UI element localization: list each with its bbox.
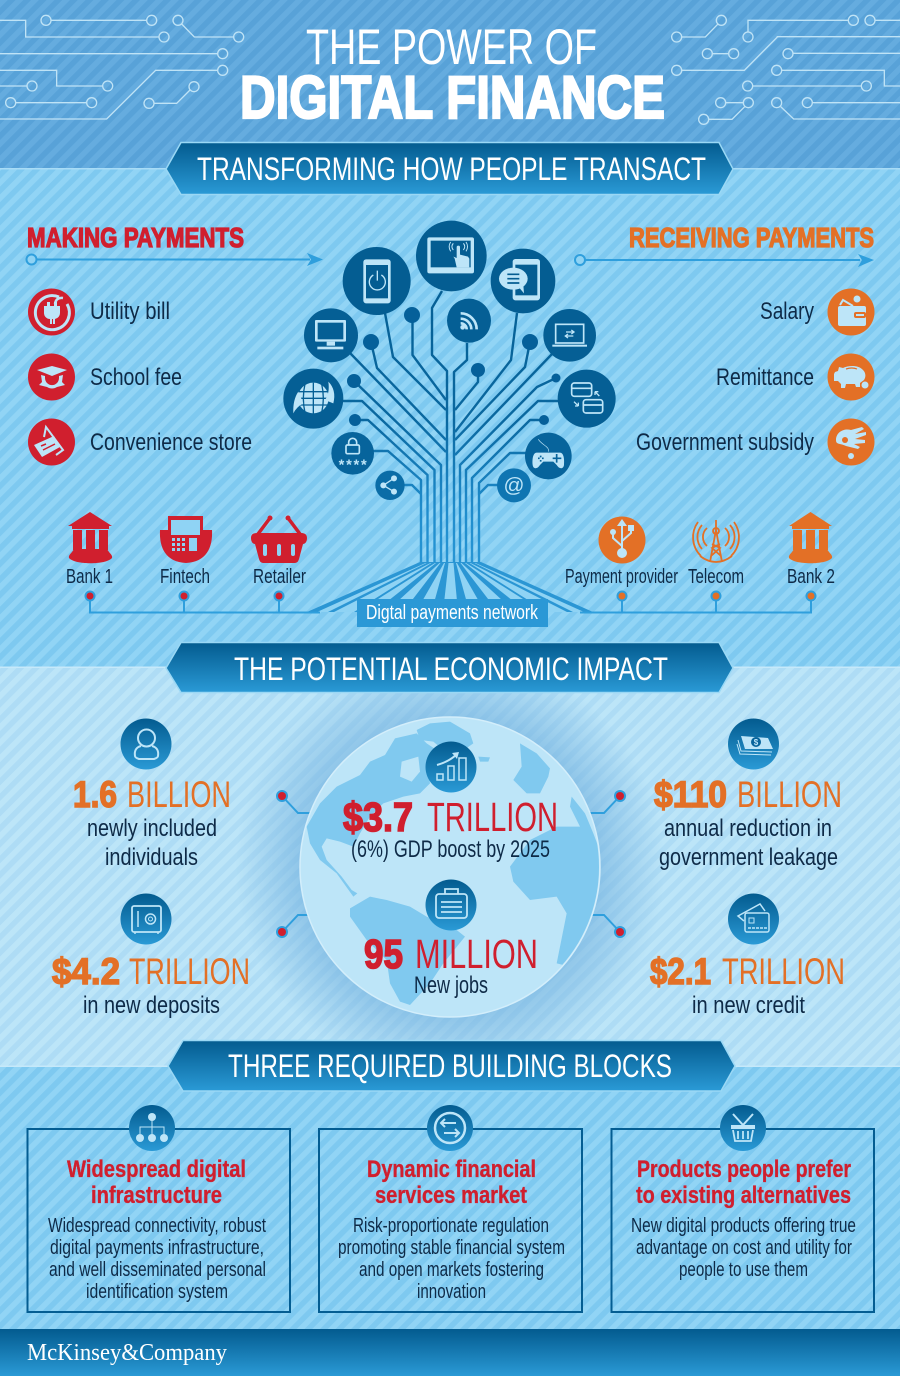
item: convenience store [28, 418, 252, 466]
stat: 2.1 trillion credit [650, 894, 845, 1019]
stat: 4.2 trillion deposits: in new deposits [83, 992, 220, 1019]
body text [48, 1215, 266, 1303]
background: economic impact section [0, 667, 900, 1066]
body text: and open markets fostering [359, 1259, 544, 1281]
stat: GDP boost: $3.7 [343, 794, 413, 840]
node: retailer: Retailer [253, 566, 306, 588]
stat: 110 billion leakage: BILLION [737, 774, 842, 815]
stat: GDP boost: TRILLION [427, 794, 558, 840]
stat: 110 billion leakage: $110 [654, 774, 727, 815]
item: government subsidy: Government subsidy [636, 429, 814, 456]
node: bank 2 [787, 512, 835, 602]
item: remittance [716, 354, 874, 400]
icon: lock: **** [339, 457, 367, 473]
item: school fee [28, 354, 182, 400]
stat: 2.1 trillion credit: $2.1 [650, 951, 711, 992]
item: government subsidy [636, 418, 874, 466]
label: digital payments network [357, 599, 548, 627]
icon: basket [720, 1105, 766, 1151]
stat: GDP boost [343, 742, 558, 863]
node: telecom: Telecom [688, 566, 744, 588]
stat: 1.6 billion: individuals [105, 844, 198, 871]
node: payment provider [565, 516, 678, 602]
body text [631, 1215, 856, 1281]
ribbon: potential economic impact: THE POTENTIAL ECONOMIC IMPACT [234, 651, 668, 687]
item: school fee: School fee [90, 364, 182, 391]
panel: widespread digital infrastructure [28, 1105, 290, 1312]
body text: promoting stable financial system [338, 1237, 565, 1259]
title: DIGITAL FINANCE [240, 64, 665, 131]
title [240, 19, 665, 131]
item: salary: Salary [760, 298, 814, 325]
icon: rising bar chart [426, 742, 476, 792]
panel: dynamic financial services market: services market [375, 1182, 527, 1209]
background: transactions section [0, 169, 900, 667]
stat: new jobs: New jobs [414, 972, 488, 999]
stat: 110 billion leakage [654, 718, 842, 871]
arrow: making payments [26, 253, 323, 266]
icon: safe [120, 894, 172, 944]
panel: widespread digital infrastructure: Widespread digital [67, 1156, 246, 1183]
stat: 4.2 trillion deposits: $4.2 [52, 951, 120, 992]
node: bank 1: Bank 1 [66, 566, 113, 588]
ribbon: three required building blocks: THREE REQUIRED BUILDING BLOCKS [228, 1048, 672, 1084]
circuit decoration: left [0, 15, 244, 119]
tree icons [283, 221, 616, 502]
stat: 2.1 trillion credit: TRILLION [722, 951, 845, 992]
logo: McKinsey & Company: McKinsey&Company [27, 1340, 227, 1366]
stat: 1.6 billion: BILLION [127, 774, 231, 815]
body text [338, 1215, 565, 1303]
circuit decoration: right [672, 15, 900, 124]
icon: share [375, 471, 405, 500]
ribbon: three required building blocks [168, 1040, 735, 1091]
body text: Widespread connectivity, robust [48, 1215, 266, 1237]
icon: banknotes [728, 718, 779, 770]
stat: GDP boost: (6%) GDP boost by 2025 [351, 836, 550, 863]
icon: monitor [304, 308, 358, 362]
icon: person [120, 718, 172, 770]
icon: laptop [543, 309, 596, 362]
stat: 2.1 trillion credit: in new credit [692, 992, 805, 1019]
node: bank 2: Bank 2 [787, 566, 835, 588]
title: THE POWER OF [306, 19, 597, 75]
panel: products people prefer: to existing alternatives [636, 1182, 851, 1209]
body text: digital payments infrastructure, [50, 1237, 264, 1259]
icon: wifi [447, 299, 491, 343]
body text: people to use them [679, 1259, 808, 1281]
connectors to globe [276, 790, 626, 938]
stat: 110 billion leakage: annual reduction in [664, 815, 832, 842]
network fan base [307, 562, 593, 612]
background: building blocks section [0, 1066, 900, 1329]
panel: products people prefer [612, 1105, 874, 1312]
item: convenience store: Convenience store [90, 429, 252, 456]
globe [300, 717, 603, 1017]
icon: at sign [497, 468, 531, 502]
icon: briefcase [426, 880, 476, 930]
stat: 1.6 billion: newly included [87, 815, 217, 842]
node: retailer [251, 516, 307, 602]
stat: 4.2 trillion deposits [52, 894, 250, 1019]
background: header band [0, 0, 900, 169]
panel: dynamic financial services market: Dynamic financial [367, 1156, 536, 1183]
icon: windows [558, 370, 616, 428]
stat: 110 billion leakage: government leakage [659, 844, 838, 871]
arrow: receiving payments [575, 254, 874, 267]
stat: 4.2 trillion deposits: TRILLION [129, 951, 250, 992]
panel: receiving payments [575, 222, 874, 466]
icon: tablet touch [416, 221, 487, 291]
stat: new jobs [364, 880, 538, 999]
icon: phone chat [491, 249, 555, 313]
stat: 1.6 billion [73, 718, 231, 871]
stat: new jobs: 95 [364, 931, 403, 977]
ribbon: potential economic impact [166, 642, 733, 692]
ribbon: transforming how people transact [166, 142, 733, 194]
panel: making payments [26, 222, 323, 466]
node: payment provider: Payment provider [565, 566, 678, 588]
icon: credit cards [728, 894, 779, 944]
heading: making payments: MAKING PAYMENTS [27, 222, 244, 253]
panel: widespread digital infrastructure: infrastructure [91, 1182, 222, 1209]
body text: identification system [86, 1281, 228, 1303]
icon: exchange arrows [427, 1105, 473, 1151]
icon: at sign: @ [504, 474, 524, 497]
node: fintech: Fintech [160, 566, 210, 588]
globe halo [247, 693, 653, 1040]
icon: globe arrows [283, 369, 343, 429]
chart: digital payments tree [283, 221, 616, 612]
footer [0, 1329, 900, 1376]
item: utility bill: Utility bill [90, 298, 170, 325]
panel: products people prefer: Products people prefer [637, 1156, 851, 1183]
item: utility bill [28, 288, 170, 336]
icon: network hierarchy [129, 1105, 175, 1151]
network connector line [90, 596, 811, 612]
ribbon: transforming how people transact: TRANSFORMING HOW PEOPLE TRANSACT [197, 151, 706, 187]
body text: innovation [417, 1281, 486, 1303]
tree branches [342, 291, 560, 563]
panel: dynamic financial services market [319, 1105, 582, 1312]
item: remittance: Remittance [716, 364, 814, 391]
item: salary [760, 288, 874, 336]
node: telecom [688, 520, 744, 602]
node: bank 1 [66, 512, 113, 602]
icon: phone power [343, 247, 411, 315]
body text: Risk-proportionate regulation [353, 1215, 549, 1237]
label: digital payments network: Digtal payments network [366, 602, 539, 624]
stat: new jobs: MILLION [415, 931, 538, 977]
icon: lock [331, 432, 374, 475]
icon: gamepad [525, 433, 572, 479]
stat: 1.6 billion: 1.6 [73, 774, 117, 815]
icon: banknotes: $ [754, 738, 759, 747]
body text: and well disseminated personal [49, 1259, 266, 1281]
branch end dots [347, 307, 560, 426]
node: fintech [160, 516, 212, 602]
